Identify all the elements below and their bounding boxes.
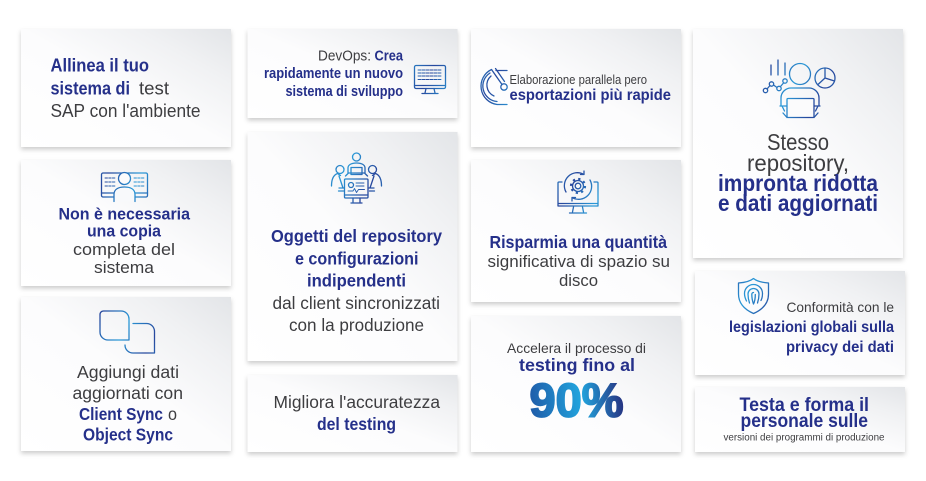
text: significativa spazio: significativa di spazio su (488, 252, 670, 271)
text: stesso: Stesso (767, 129, 829, 155)
icon: gear monitor (558, 171, 598, 213)
panel: stesso repository (693, 29, 903, 258)
text: completa del: completa del (73, 240, 175, 259)
text: con la produzione: con la produzione (289, 315, 424, 335)
text: sistema di test: sistema di (50, 78, 130, 98)
heading: e configurazioni: e configurazioni (295, 248, 418, 268)
text: elaborazione parallela: Elaborazione parallela pero (510, 73, 647, 87)
icon: monitor code (414, 66, 446, 94)
text: rapidamente un nuovo: rapidamente un nuovo (264, 66, 403, 82)
text: devops crea: DevOps: (318, 48, 371, 64)
heading: impronta ridotta: impronta ridotta (718, 170, 878, 196)
panel: allinea sistema (21, 29, 231, 147)
panel: accelera testing (471, 316, 681, 452)
text: sistema di sviluppo: sistema di sviluppo (286, 84, 403, 100)
heading: testing fino al: testing fino al (519, 355, 635, 375)
panel: devops (248, 29, 458, 118)
icon: team around monitor (332, 153, 382, 203)
text: versioni programmi: versioni dei programmi di produzione (724, 432, 885, 444)
heading: personale sulle: personale sulle (740, 411, 868, 432)
heading: risparmia quantita: Risparmia una quantità (490, 232, 667, 252)
panel: conformita privacy (695, 271, 905, 375)
text: SAP con ambiente: SAP con l'ambiente (50, 100, 200, 121)
heading: e dati aggiornati: e dati aggiornati (718, 190, 878, 216)
panel: elaborazione parallela (471, 29, 681, 147)
heading: non e necessaria: Non è necessaria (58, 204, 191, 224)
heading: oggetti del repository: Oggetti del repository (271, 226, 442, 246)
text: aggiungi dati: Aggiungi dati (77, 362, 179, 382)
icon: sync squares (100, 311, 154, 353)
heading: privacy dei dati: privacy dei dati (786, 339, 894, 356)
text: devops crea (318, 48, 404, 64)
panel: non necessaria copia (21, 160, 231, 286)
text: sistema: sistema (94, 258, 155, 277)
text: conformita con le: Conformità con le (786, 299, 894, 315)
text: repository: repository, (747, 150, 849, 176)
icon: shield fingerprint (738, 278, 768, 314)
heading: esportazioni piu rapide: esportazioni più rapide (510, 87, 671, 104)
panel: risparmia spazio (471, 160, 681, 302)
heading: indipendenti: indipendenti (307, 270, 406, 290)
stat: 90 percent: 90% (530, 374, 624, 426)
heading: legislazioni globali sulla: legislazioni globali sulla (729, 319, 894, 336)
heading: una copia: una copia (87, 222, 161, 240)
text: sistema di test: test (139, 78, 169, 98)
icon: person with screens (102, 172, 148, 202)
heading: testa e forma il: Testa e forma il (740, 395, 869, 416)
text: devops crea: Crea (374, 48, 404, 64)
icon: speedometer (481, 68, 507, 104)
text: dal client sincronizzati: dal client sincronizzati (272, 293, 440, 313)
text: object sync: Object Sync (83, 424, 173, 444)
text: client sync o: Client Sync (79, 404, 163, 424)
heading: del testing: del testing (317, 414, 396, 434)
panel: oggetti repository (248, 132, 458, 361)
text: aggiornati con: aggiornati con (72, 383, 183, 403)
text: client sync o: o (168, 404, 177, 424)
text: disco: disco (559, 271, 598, 290)
text: migliora accuratezza: Migliora l'accuratezza (274, 392, 440, 412)
panel: aggiungi dati (21, 297, 231, 451)
text: accelera il processo: Accelera il processo di (507, 340, 646, 356)
panel: migliora accuratezza (248, 375, 458, 452)
panel: testa e forma (695, 387, 905, 452)
heading: allinea il tuo: Allinea il tuo (50, 54, 149, 76)
icon: person laptop charts (763, 60, 835, 118)
